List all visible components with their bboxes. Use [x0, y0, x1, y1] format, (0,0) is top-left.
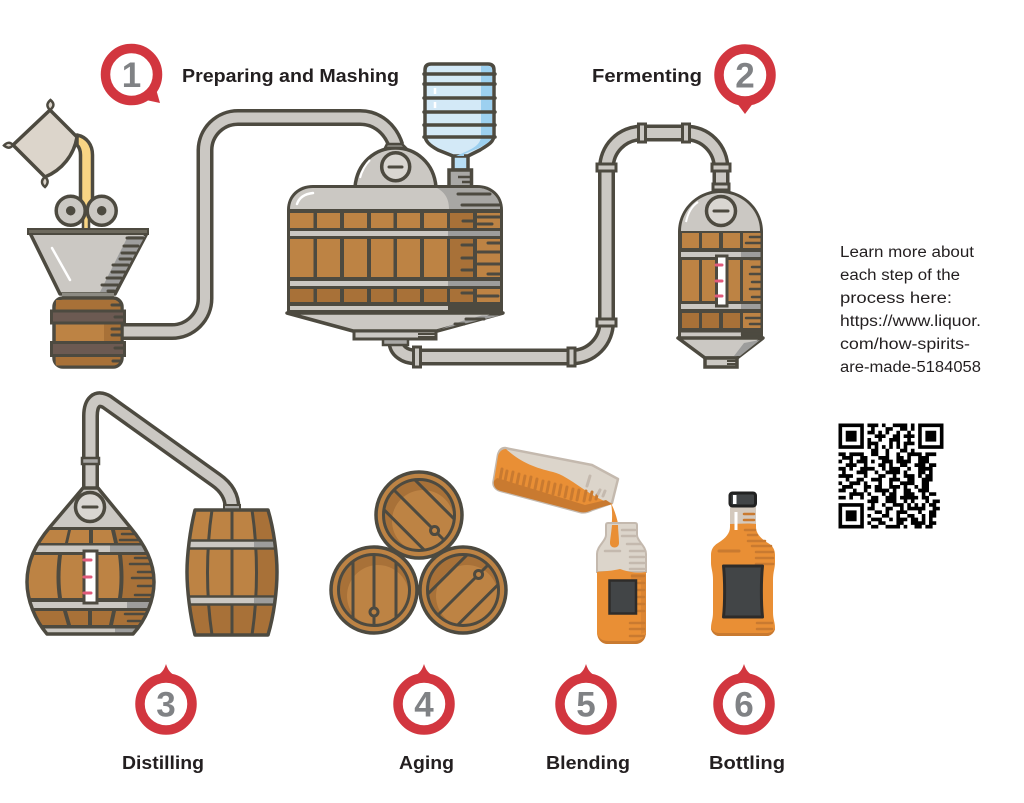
label: Bottling: Bottling	[709, 753, 785, 773]
grain stream	[77, 135, 92, 216]
still sight glass	[84, 551, 97, 603]
still gauge	[76, 492, 104, 522]
bottle cap	[730, 493, 756, 506]
label: Aging: Aging	[399, 753, 454, 773]
label: Distilling: Distilling	[122, 753, 204, 773]
paragraph: learn more: each step of the	[840, 267, 960, 284]
badge 2: 2	[735, 56, 755, 96]
fermenter planks	[682, 233, 760, 328]
heading: Fermenting: Fermenting	[592, 66, 702, 86]
icon: aging barrels	[331, 472, 506, 633]
blending bottle label	[610, 580, 636, 614]
badge 4: 4	[414, 686, 434, 724]
paragraph: learn more	[840, 244, 981, 376]
tun cone	[287, 313, 503, 331]
badge 6: 6	[734, 686, 754, 724]
paragraph: learn more: https://www.liquor.	[840, 313, 981, 330]
badge 4	[398, 664, 450, 730]
paragraph: learn more: are-made-5184058	[840, 359, 981, 376]
badge 3	[140, 664, 192, 730]
badge 1	[106, 48, 160, 103]
paragraph: learn more: process here:	[840, 290, 952, 307]
tun dome	[355, 148, 436, 187]
barrel right	[420, 547, 506, 633]
badge 2	[719, 49, 771, 114]
paragraph: learn more: Learn more about	[840, 244, 975, 261]
badge 5: 5	[576, 686, 596, 724]
tun gauge	[382, 153, 410, 181]
icon: grain sack	[4, 100, 92, 216]
label: Blending: Blending	[546, 753, 630, 773]
badge 1: 1	[122, 56, 141, 95]
fermenter cone	[678, 338, 763, 358]
fermenter gauge	[706, 196, 736, 226]
pour stream	[610, 503, 620, 547]
bottle label	[724, 566, 762, 617]
icon: mash tun	[287, 144, 503, 345]
icon: mill rollers	[56, 196, 116, 230]
icon: pot still	[24, 488, 156, 634]
icon: receiving barrel	[185, 508, 280, 640]
stream inside bottle	[610, 525, 619, 548]
fermenter sight glass	[716, 256, 727, 306]
icon: fermenter	[678, 190, 763, 367]
QR code	[838, 425, 942, 527]
pipe: mill to mash tun	[122, 118, 396, 332]
tun body	[287, 185, 503, 313]
icon: still pipe	[82, 400, 240, 510]
badge 6	[718, 664, 770, 730]
icon: blending bottle	[597, 523, 646, 644]
icon: pouring bottle	[493, 448, 620, 547]
paragraph: learn more: com/how-spirits-	[840, 336, 970, 353]
barrel top	[376, 472, 462, 558]
icon: hopper	[28, 229, 148, 298]
pipe: mash tun to fermenter	[396, 124, 730, 367]
icon: finished bottle	[711, 493, 775, 636]
icon: water bottle	[424, 64, 495, 187]
badge 3: 3	[156, 686, 176, 724]
heading: Preparing and Mashing: Preparing and Mashing	[182, 66, 399, 86]
barrel left	[331, 547, 417, 633]
icon: mash cask	[52, 298, 124, 367]
badge 5	[560, 664, 612, 730]
